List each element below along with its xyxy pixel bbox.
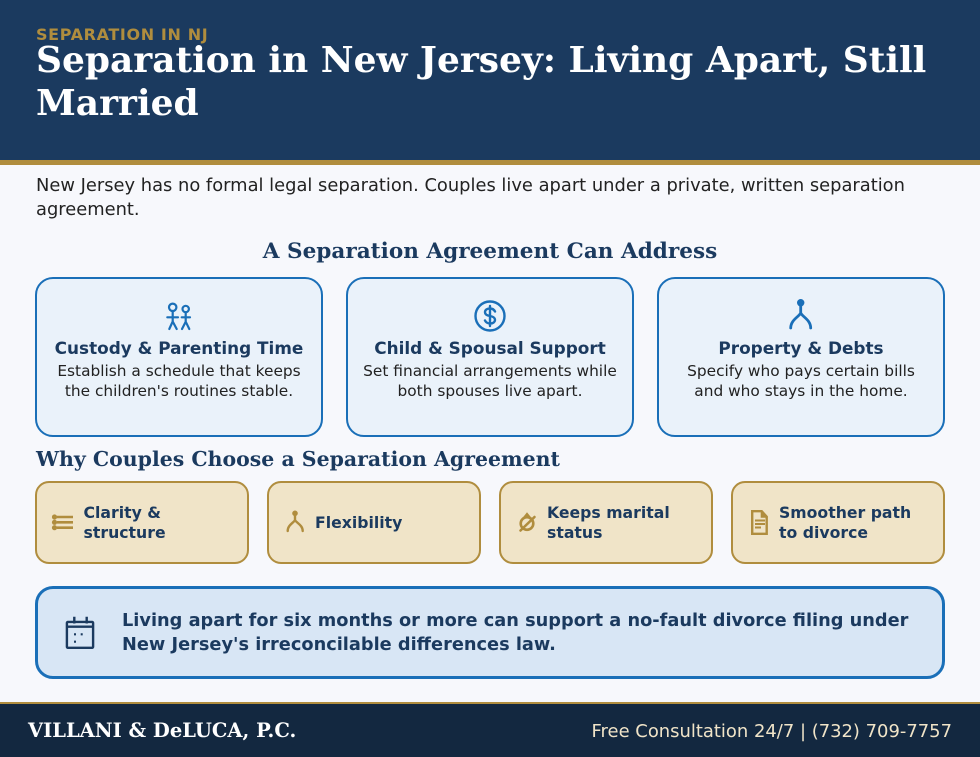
panel: property (657, 277, 945, 437)
panel: clarity (35, 481, 249, 564)
card text: Specify who pays certain bills (687, 362, 915, 380)
card heading: Child & Spousal Support (374, 338, 606, 358)
intro text: New Jersey has no formal legal separation. Couples live apart under a private, written separation (36, 175, 905, 196)
label: Clarity & (84, 502, 161, 522)
icon: dollar (474, 300, 506, 332)
icon: fork (286, 510, 304, 532)
label (84, 502, 166, 542)
intro text: agreement. (36, 199, 140, 220)
panel: path to divorce (731, 481, 945, 564)
callout text: New Jersey's irreconcilable differences law. (122, 635, 556, 655)
label (547, 502, 670, 542)
icon: parents (166, 302, 192, 330)
label: Keeps marital (547, 502, 670, 522)
callout text: Living apart for six months or more can support a no-fault divorce filing under (122, 611, 908, 631)
header band (0, 0, 980, 165)
title: Separation in New Jersey: Living Apart, Still (36, 38, 926, 80)
label: structure (84, 522, 166, 542)
icon: fork (789, 299, 812, 330)
card heading: Custody & Parenting Time (55, 338, 303, 358)
callout: six months (35, 586, 945, 679)
panel: custody (35, 277, 323, 437)
card text: both spouses live apart. (398, 382, 582, 400)
icon: list (52, 514, 73, 530)
section heading: agreement topics: A Separation Agreement Can Address (263, 239, 717, 264)
contact info: Free Consultation 24/7 | (732) 709-7757 (592, 720, 952, 742)
panel: support (346, 277, 634, 437)
icon: calendar (66, 616, 94, 649)
panel: marital status (499, 481, 713, 564)
label (779, 502, 911, 542)
panel: flexibility (267, 481, 481, 564)
label: status (547, 522, 602, 542)
icon: ring crossed (519, 512, 536, 532)
card text: Set financial arrangements while (363, 362, 617, 380)
card text: the children's routines stable. (65, 382, 293, 400)
card text (363, 362, 617, 400)
card text (687, 362, 915, 400)
label: to divorce (779, 522, 868, 542)
icon: document (751, 510, 768, 535)
intro text (36, 175, 905, 220)
label: Flexibility (315, 512, 402, 532)
label: Smoother path (779, 502, 911, 522)
section heading: reasons: Why Couples Choose a Separation Agreement (36, 447, 560, 471)
title (36, 38, 926, 124)
card text: and who stays in the home. (694, 382, 908, 400)
card text (57, 362, 301, 400)
card heading: Property & Debts (718, 338, 884, 358)
footer band (0, 702, 980, 757)
title: Married (36, 82, 199, 124)
eyebrow label: SEPARATION IN NJ (36, 25, 208, 44)
firm name: VILLANI & DeLUCA, P.C. (28, 719, 296, 742)
callout text (122, 611, 908, 655)
card text: Establish a schedule that keeps (57, 362, 301, 380)
